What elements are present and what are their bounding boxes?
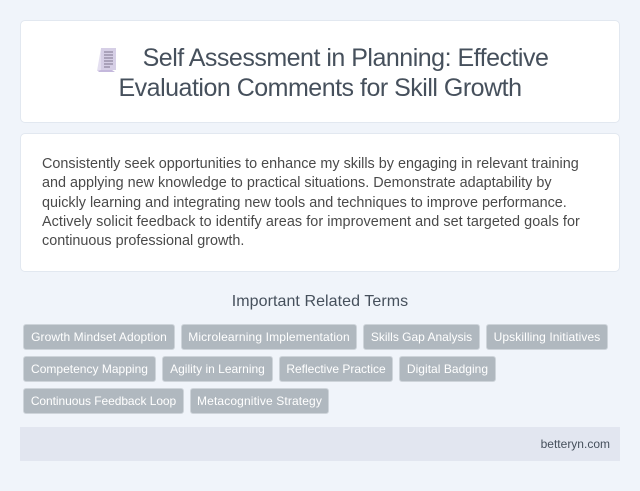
description text: Consistently seek opportunities to enhance my skills by engaging in relevant training [42, 156, 579, 172]
description text: Actively solicit feedback to identify areas for improvement and set targeted goals for [42, 214, 580, 230]
tag [181, 324, 357, 350]
description text: continuous professional growth. [42, 233, 244, 249]
heading: important related terms: Important Related Terms [232, 293, 408, 310]
tag [190, 388, 329, 414]
description text: and applying new knowledge to practical situations. Demonstrate adaptability by [42, 175, 552, 191]
tag [363, 324, 480, 350]
tag: Metacognitive Strategy [197, 394, 322, 408]
tag: Agility in Learning [170, 362, 265, 376]
tag [23, 324, 175, 350]
title text: Self Assessment in Planning: Effective [143, 44, 548, 72]
panel: description card [20, 133, 620, 272]
tag: Competency Mapping [31, 362, 148, 376]
tag [23, 388, 184, 414]
tag [162, 356, 273, 382]
tag: Upskilling Initiatives [494, 330, 600, 344]
tag: Growth Mindset Adoption [31, 330, 167, 344]
tag: Microlearning Implementation [188, 330, 350, 344]
tags: related terms [23, 324, 608, 414]
tag [399, 356, 496, 382]
description text: quickly learning and integrating new tools and techniques to improve performance. [42, 195, 567, 211]
panel: title card [20, 20, 620, 123]
tag [486, 324, 608, 350]
footer brand text: betteryn.com [541, 437, 610, 451]
tag: Digital Badging [407, 362, 488, 376]
title text: Evaluation Comments for Skill Growth [118, 74, 521, 102]
footer bar [20, 427, 620, 461]
icon: scroll document [97, 48, 116, 72]
tag: Continuous Feedback Loop [31, 394, 176, 408]
tag: Reflective Practice [286, 362, 386, 376]
tag [23, 356, 156, 382]
tag [279, 356, 393, 382]
title text [118, 44, 548, 102]
tag: Skills Gap Analysis [371, 330, 472, 344]
description text [42, 156, 580, 249]
